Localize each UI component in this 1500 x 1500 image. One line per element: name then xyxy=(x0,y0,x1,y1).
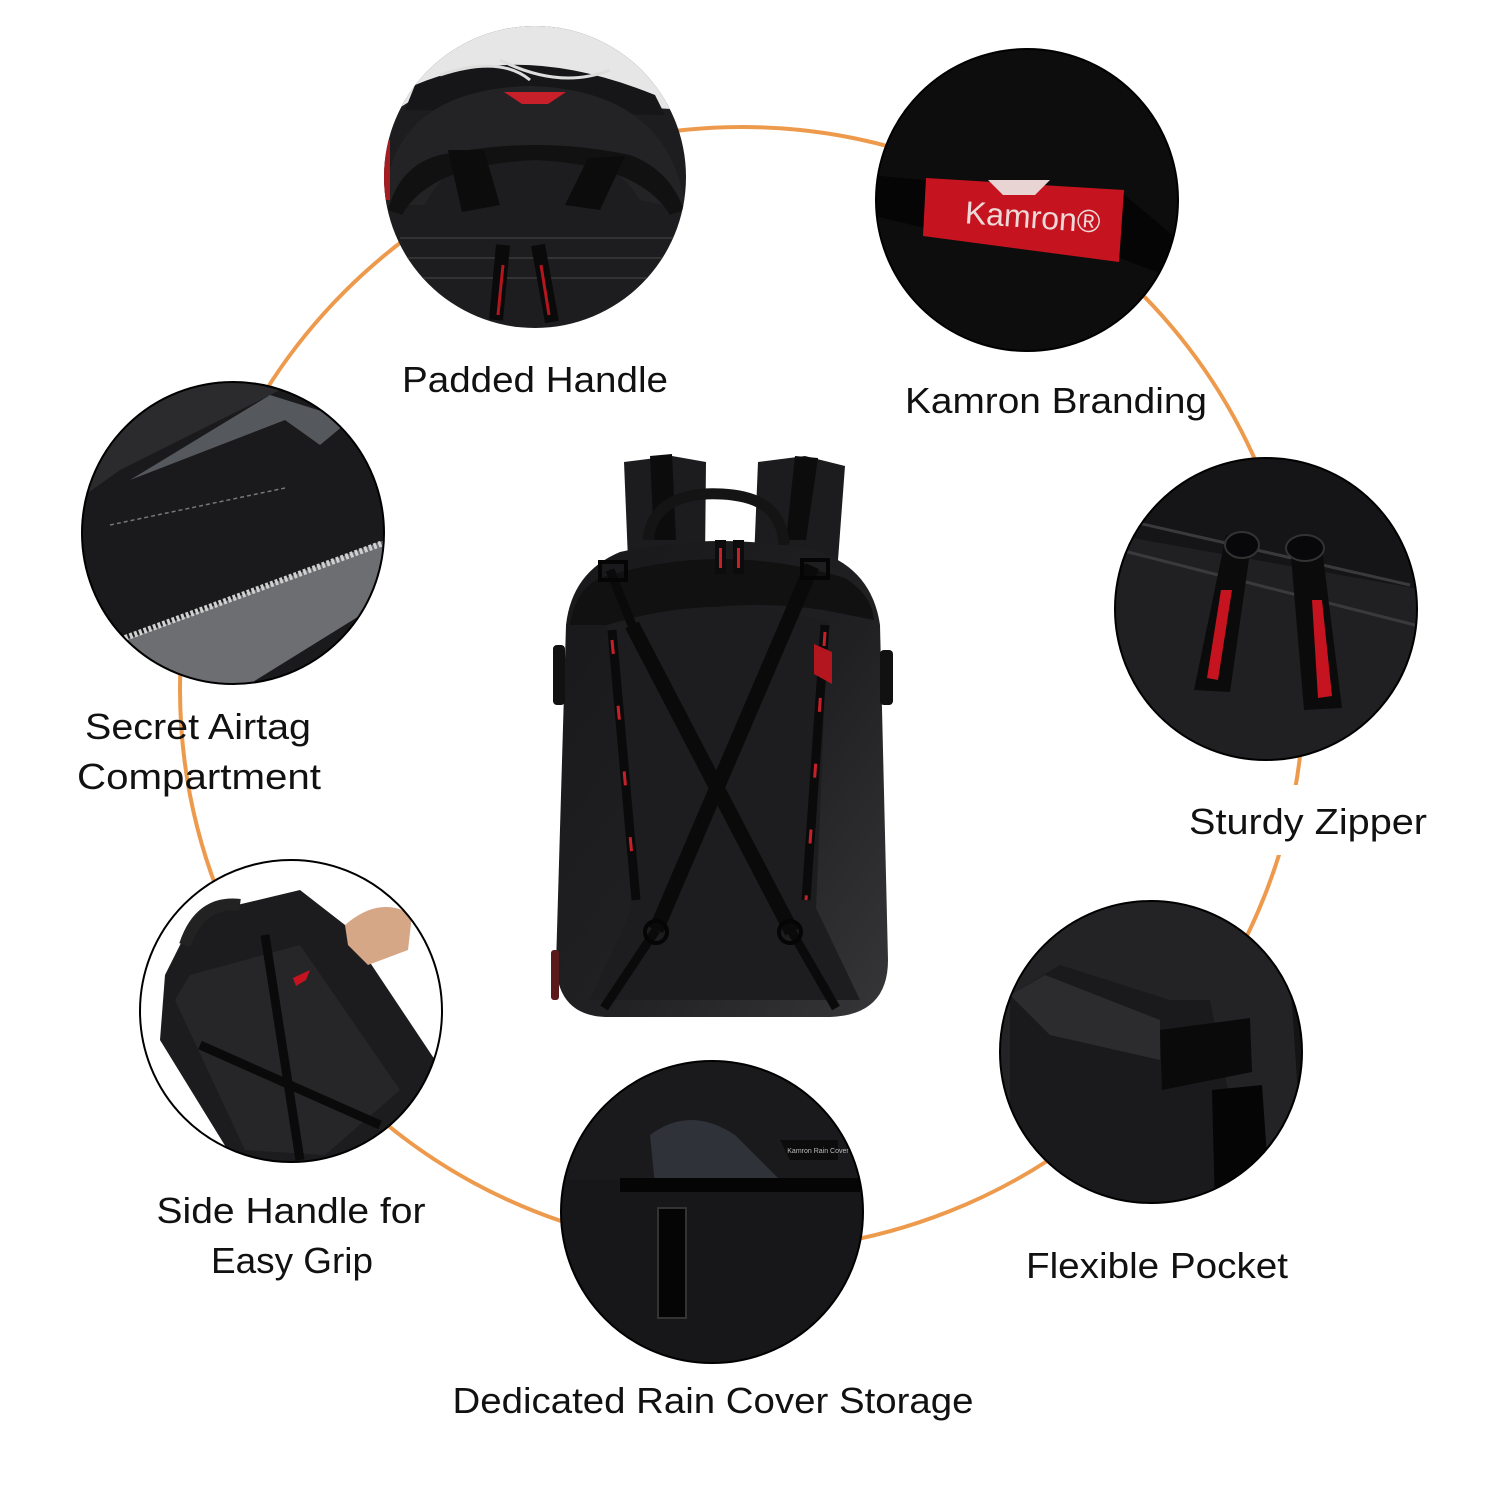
zipper pulls xyxy=(715,540,744,574)
centre panel xyxy=(590,607,860,1000)
label: side handle xyxy=(156,1190,426,1281)
zipper pull right xyxy=(1286,535,1342,710)
side hardware xyxy=(553,645,893,705)
photo: kamron branding xyxy=(870,45,1190,355)
bag body xyxy=(556,541,888,1017)
photo: rain cover storage: Kamron Rain Cover xyxy=(787,1148,849,1155)
label: padded handle: Padded Handle xyxy=(402,359,668,400)
top handle xyxy=(648,494,784,545)
photo: airtag compartment xyxy=(78,380,388,690)
photo: flexible pocket xyxy=(995,895,1310,1210)
label: side handle: Easy Grip xyxy=(211,1240,373,1281)
label: rain cover storage: Dedicated Rain Cover Storage xyxy=(452,1380,974,1421)
circle outline: flexible pocket xyxy=(1000,901,1302,1203)
red label xyxy=(923,178,1124,262)
label: side handle: Side Handle for xyxy=(156,1190,426,1231)
red stitch seams xyxy=(612,625,825,900)
label: kamron branding: Kamron Branding xyxy=(905,380,1207,421)
circle outline: sturdy zipper xyxy=(1115,458,1417,760)
circle outline: kamron branding xyxy=(876,49,1178,351)
zipper pull left xyxy=(1194,532,1259,692)
label: sturdy zipper: Sturdy Zipper xyxy=(1189,801,1427,842)
top panel xyxy=(570,559,874,625)
circle outline: rain cover storage xyxy=(561,1061,863,1363)
text background breaking the ring xyxy=(1170,785,1440,855)
photo: side handle xyxy=(160,881,434,1161)
circle outline: airtag compartment xyxy=(82,382,384,684)
circle outline: side handle xyxy=(140,860,442,1162)
label: secret airtag compartment: Secret Airtag xyxy=(85,706,311,747)
buckles xyxy=(600,560,828,943)
label: secret airtag compartment: Compartment xyxy=(77,756,321,797)
orange connecting ring xyxy=(180,127,1304,1251)
label: secret airtag compartment xyxy=(77,706,321,797)
X straps xyxy=(632,566,812,932)
red brand tag xyxy=(814,644,832,684)
shoulder straps xyxy=(624,454,845,560)
red label: Kamron® xyxy=(964,194,1102,240)
photo: rain cover storage xyxy=(555,1055,870,1370)
label: flexible pocket: Flexible Pocket xyxy=(1026,1245,1288,1286)
photo: sturdy zipper xyxy=(1110,455,1425,765)
main backpack photo xyxy=(551,454,893,1017)
photo: padded handle xyxy=(380,20,690,330)
